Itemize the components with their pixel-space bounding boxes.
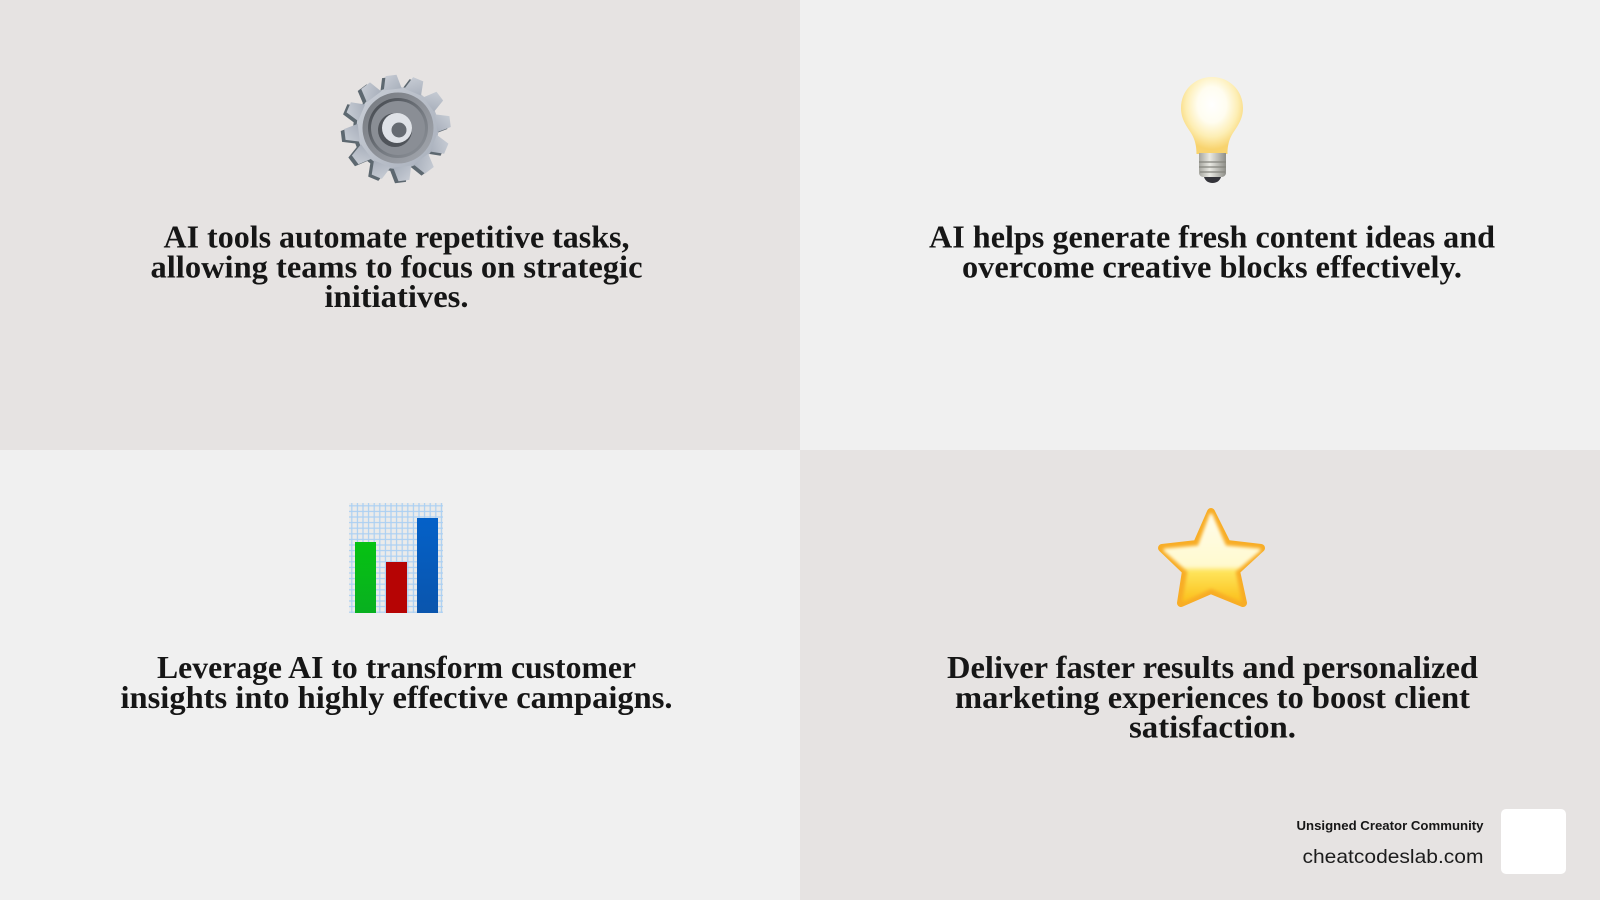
panel: insights — [0, 450, 800, 900]
panel: client satisfaction — [800, 450, 1600, 900]
heading: automation text: initiatives. — [324, 278, 468, 314]
icon: light bulb — [1181, 77, 1243, 183]
logo placeholder — [1501, 809, 1566, 874]
website: cheatcodeslab.com — [1302, 846, 1484, 868]
heading: client satisfaction text — [947, 649, 1478, 744]
heading: insights text: insights into highly effective campaigns. — [120, 679, 672, 715]
heading: automation text: allowing teams to focus on strategic — [150, 248, 642, 284]
footer: branding — [1296, 809, 1566, 874]
icon: star — [1162, 512, 1261, 603]
heading: client satisfaction text: marketing experiences to boost client — [955, 679, 1470, 715]
icon: gear — [335, 69, 457, 189]
panel: automation — [0, 0, 800, 450]
heading: ideas text: overcome creative blocks effectively. — [962, 248, 1462, 284]
panel: ideas — [800, 0, 1600, 450]
heading: automation text: AI tools automate repetitive tasks, — [164, 218, 630, 254]
heading: insights text — [120, 649, 672, 715]
icon: bar chart — [349, 503, 443, 613]
heading: client satisfaction text: Deliver faster results and personalized — [947, 649, 1478, 685]
heading: insights text: Leverage AI to transform customer — [157, 649, 636, 685]
heading: ideas text: AI helps generate fresh content ideas and — [929, 218, 1495, 254]
community label: Unsigned Creator Community — [1296, 818, 1484, 833]
heading: ideas text — [929, 218, 1495, 284]
heading: automation text — [150, 218, 642, 314]
heading: client satisfaction text: satisfaction. — [1129, 708, 1296, 744]
